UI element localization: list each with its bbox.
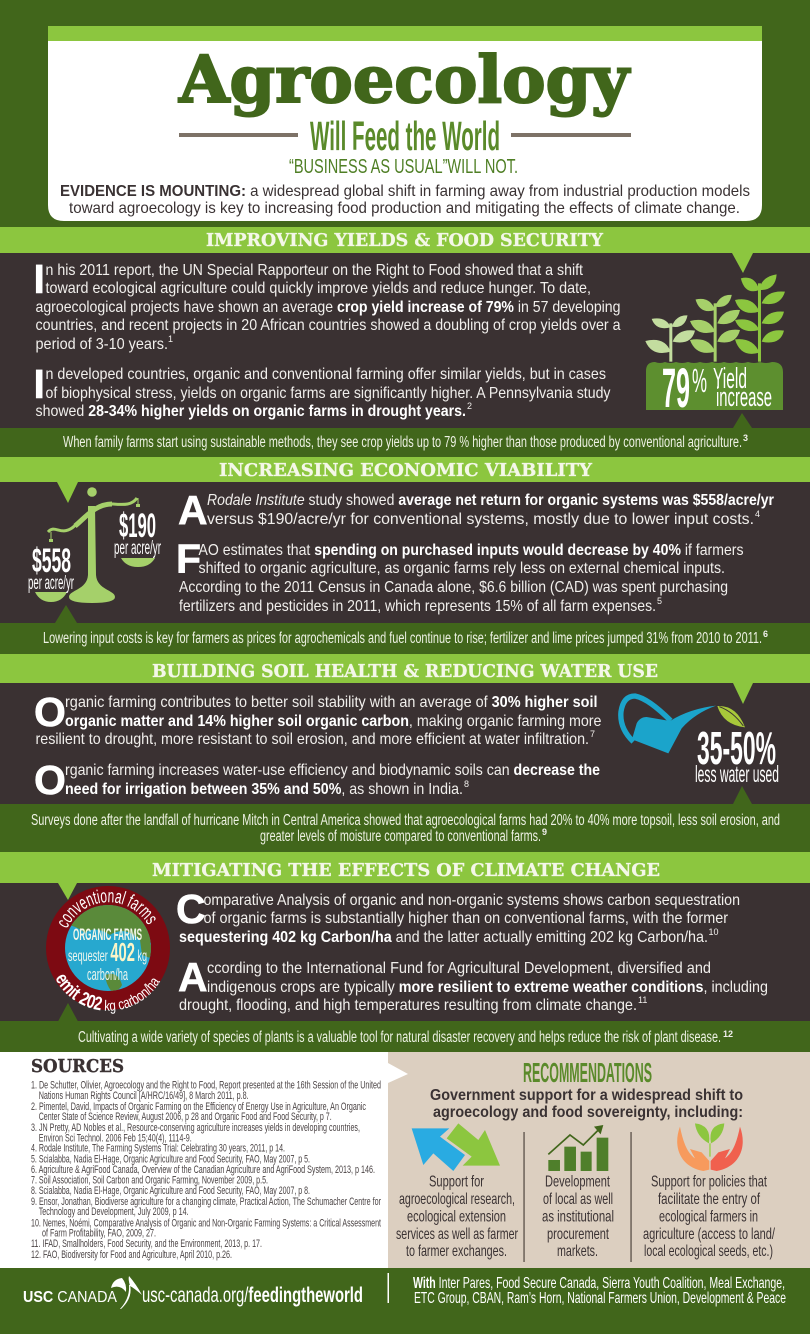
- icon: globe badge: carbon/ha: [87, 965, 128, 984]
- paragraph 1: [34, 256, 621, 353]
- paragraph 1: of organic farms is substantially higher than on conventional farms, with the former: [204, 910, 728, 927]
- label: $190: [114, 507, 161, 559]
- panel: improving yields: [0, 227, 810, 428]
- column 2 text: Development: [545, 1174, 610, 1190]
- panel: recommendations: RECOMMENDATIONS: [523, 1057, 652, 1088]
- source list: 1. De Schutter, Olivier, Agroecology and the Right to Food, Report presented at the 16th Session of the United: [31, 1080, 381, 1092]
- paragraph 2: drought, flooding, and high temperatures resulting from climate change.: [179, 997, 637, 1014]
- column 2 text: markets.: [557, 1243, 598, 1260]
- paragraph 1: 7: [590, 729, 595, 739]
- heading: IMPROVING YIELDS & FOOD SECURITY: [206, 230, 604, 251]
- strip: economic fact: 6: [763, 629, 768, 639]
- icon: globe badge: ORGANIC FARMS: [73, 925, 142, 944]
- strip: soil fact: 9: [542, 827, 547, 837]
- intro: [430, 1087, 743, 1121]
- column 1 text: [396, 1174, 518, 1260]
- arrow: [733, 683, 753, 704]
- column 1 text: to farmer exchanges.: [406, 1243, 507, 1260]
- subtitle with rules: Will Feed the World: [310, 113, 500, 159]
- icon: bar chart: [548, 1125, 608, 1171]
- tagline: “BUSINESS AS USUAL”WILL NOT.: [289, 156, 518, 178]
- paragraph 2: A: [178, 954, 208, 1000]
- paragraph 1: C: [176, 886, 206, 932]
- paragraph 2: fertilizers and pesticides in 2011, which represents 15% of all farm expenses.: [179, 598, 656, 615]
- paragraph 1: 1: [168, 334, 173, 344]
- column 2 text: of local as well: [543, 1191, 613, 1208]
- paragraph 2: of biophysical stress, yields on organic farms are significantly higher. A Pennsylvania study: [46, 385, 611, 402]
- paragraph 1: sequestering 402 kg Carbon/ha and the latter actually emitting 202 kg Carbon/ha.: [179, 929, 708, 946]
- yield callout: Yield: [713, 363, 747, 395]
- paragraph 2: need for irrigation between 35% and 50%, as shown in India.: [65, 781, 463, 798]
- paragraph 2: O: [34, 757, 66, 803]
- paragraph 2: [34, 361, 611, 420]
- paragraph 2: showed 28-34% higher yields on organic farms in drought years.: [36, 403, 466, 420]
- heading: INCREASING ECONOMIC VIABILITY: [219, 460, 593, 481]
- source list: of Farm Profitability, FAO, 2009, 27.: [42, 1228, 156, 1240]
- intro: agroecology and food sovereignty, including:: [433, 1104, 743, 1121]
- arrow: [732, 253, 753, 273]
- source list: 4. Rodale Institute, The Farming Systems Trial: Celebrating 30 years, 2011, p 14.: [31, 1142, 285, 1154]
- paragraph 1: versus $190/acre/yr for conventional systems, mostly due to lower input costs.: [207, 511, 754, 528]
- source list: 2. Pimentel, David, Impacts of Organic Farming on the Efficiency of Energy Use in Agriculture, An Organic: [31, 1101, 366, 1113]
- partners: [413, 1275, 786, 1307]
- icon: globe badge: emit 202 kg carbon/ha: [56, 974, 160, 1014]
- panel: economic viability: [0, 457, 810, 623]
- paragraph 1: omparative Analysis of organic and non-organic systems shows carbon sequestration: [204, 892, 740, 909]
- icon: globe badge: conventional farms: [59, 890, 156, 928]
- paragraph 1: agroecological projects have shown an average crop yield increase of 79% in 57 developing: [36, 299, 620, 316]
- paragraph 1: [34, 689, 602, 748]
- icon: globe badge: sequester 402 kg: [68, 937, 147, 967]
- paragraph 2: indigenous crops are typically more resilient to extreme weather conditions, including: [207, 979, 768, 996]
- intro text: [60, 183, 750, 217]
- arrow: [57, 482, 78, 503]
- paragraph 1: [176, 886, 740, 946]
- source list: 6. Agriculture & AgriFood Canada, Overview of the Canadian Agriculture and AgriFood System, 2013, p 146.: [31, 1164, 375, 1176]
- intro: Government support for a widespread shift to: [430, 1087, 743, 1104]
- paragraph 2: [176, 536, 744, 615]
- label: $190: $190: [119, 507, 156, 545]
- column 2 text: [542, 1174, 614, 1260]
- source list: 11. IFAD, Smallholders, Food Security, and the Environment, 2013, p. 17.: [31, 1238, 262, 1250]
- source list: 3. JN Pretty, AD Nobles et al., Resource-conserving agriculture increases yields in developing countries,: [31, 1122, 360, 1134]
- label: $558: per acre/yr: [28, 573, 74, 594]
- arrow: [58, 883, 77, 900]
- paragraph 2: ccording to the International Fund for Agricultural Development, diversified and: [207, 960, 711, 977]
- paragraph 1: Rodale Institute study showed average net return for organic systems was $558/acre/yr: [207, 492, 774, 509]
- strip: yields fact: [0, 413, 810, 457]
- paragraph 2: [178, 954, 768, 1014]
- paragraph 1: rganic farming contributes to better soil stability with an average of 30% higher soil: [65, 694, 598, 711]
- subtitle with rules: [179, 113, 631, 159]
- icon: globe badge: [46, 886, 170, 1014]
- heading: BUILDING SOIL HEALTH & REDUCING WATER USE: [152, 661, 658, 682]
- yield callout: [646, 356, 783, 419]
- strip: yields fact: 3: [743, 433, 748, 443]
- icon: logo sprout: [111, 1276, 142, 1309]
- column 3 text: ecological farmers in: [659, 1208, 758, 1226]
- paragraph 1: [178, 487, 774, 533]
- icon: plants: [645, 274, 785, 362]
- icon: hands and sprout: [677, 1123, 743, 1171]
- paragraph 1: O: [34, 689, 66, 735]
- paragraph 1: resilient to drought, more resistant to soil erosion, and more efficient at water infiltration.: [36, 731, 589, 748]
- strip: climate fact: 12: [723, 1029, 733, 1039]
- source list: 7. Soil Association, Soil Carbon and Organic Farming, November 2009, p.5.: [31, 1174, 268, 1186]
- source list: 12. FAO, Biodiversity for Food and Agriculture, April 2010, p.26.: [31, 1249, 232, 1261]
- header panel: [48, 26, 762, 221]
- panel: climate change: [0, 852, 810, 1021]
- strip: soil fact: greater levels of moisture compared to conventional farms.: [260, 828, 541, 845]
- column 1 text: agroecological research,: [399, 1191, 515, 1208]
- paragraph 2: F: [176, 536, 201, 582]
- paragraph 1: toward ecological agriculture could quickly improve yields and reduce hunger. To date,: [46, 280, 591, 297]
- panel: recommendations: [388, 1052, 810, 1268]
- source list: 10. Nemes, Noémi, Comparative Analysis of Organic and Non-Organic Farming Systems: a Critical Assessment: [31, 1218, 381, 1230]
- column 1 text: services as well as farmer: [396, 1226, 518, 1243]
- title: Agroecology: [178, 42, 631, 118]
- column 1 text: ecological extension: [407, 1208, 506, 1226]
- source list: Center State of Science Review, August 2006, p 28 and Organic Food and Food Security, p 7.: [39, 1111, 332, 1123]
- column 1 text: Support for: [429, 1174, 484, 1190]
- icon: exchange arrows: [412, 1123, 500, 1171]
- paragraph 2: 5: [657, 596, 662, 606]
- intro text: EVIDENCE IS MOUNTING: a widespread global shift in farming away from industrial production models: [60, 183, 750, 200]
- paragraph 2: shifted to organic agriculture, as organic farms rely less on external chemical inputs.: [198, 560, 725, 577]
- source list: Technology and Development, July 2009, p 14.: [39, 1206, 189, 1218]
- column 2 text: procurement: [547, 1226, 609, 1243]
- paragraph 2: n developed countries, organic and conventional farming offer similar yields, but in cases: [46, 366, 606, 383]
- paragraph 1: A: [178, 487, 208, 533]
- paragraph 2: 2: [467, 401, 472, 411]
- source list: Nations Human Rights Council [A/HRC/16/49], 8 March 2011, p.8.: [39, 1090, 249, 1102]
- icon: watering can: [621, 696, 745, 753]
- paragraph 2: I: [34, 361, 45, 407]
- paragraph 1: countries, and recent projects in 20 African countries showed a doubling of crop yields over a: [36, 317, 621, 334]
- paragraph 1: n his 2011 report, the UN Special Rapporteur on the Right to Food showed that a shift: [46, 262, 584, 279]
- paragraph 2: According to the 2011 Census in Canada alone, $6.6 billion (CAD) was spent purchasing: [179, 579, 728, 596]
- column 2 text: as institutional: [542, 1208, 614, 1226]
- paragraph 2: rganic farming increases water-use efficiency and biodynamic soils can decrease the: [65, 762, 600, 779]
- source list: Environ Sci Technol. 2006 Feb 15;40(4), 1114-9.: [39, 1132, 192, 1144]
- intro text: toward agroecology is key to increasing food production and mitigating the effects of climate change.: [69, 200, 740, 217]
- yield callout: %: [692, 362, 707, 399]
- paragraph 2: [34, 757, 600, 803]
- paragraph 1: period of 3-10 years.: [36, 336, 168, 353]
- paragraph 2: 11: [638, 995, 647, 1005]
- source list: 9. Ensor, Jonathan, Biodiverse agriculture for a changing climate, Practical Action, The Schumacher Centre for: [31, 1196, 381, 1208]
- source list: 5. Scialabba, Nadia El-Hage, Organic Agriculture and Food Security, FAO, May 2007, p 5.: [31, 1154, 310, 1166]
- strip: climate fact: [0, 1003, 810, 1052]
- source list: [31, 1080, 381, 1261]
- column 3 text: [643, 1174, 775, 1260]
- label: $558: [28, 542, 74, 594]
- panel: sources: [0, 1052, 388, 1268]
- paragraph 2: 8: [464, 779, 469, 789]
- website: usc-canada.org/feedingtheworld: [142, 1284, 363, 1307]
- water callout: [695, 722, 779, 787]
- paragraph 1: 10: [708, 927, 719, 937]
- icon: scale: [35, 487, 155, 603]
- paragraph 1: 4: [755, 509, 760, 519]
- column 3 text: facilitate the entry of: [658, 1191, 760, 1208]
- panel: soil health: [0, 654, 810, 804]
- paragraph 1: organic matter and 14% higher soil organic carbon, making organic farming more: [65, 713, 602, 730]
- paragraph 1: I: [34, 256, 45, 302]
- strip: soil fact: [0, 786, 810, 852]
- strip: economic fact: [0, 605, 810, 654]
- paragraph 2: AO estimates that spending on purchased inputs would decrease by 40% if farmers: [198, 542, 744, 559]
- label: $558: $558: [32, 542, 71, 580]
- yield callout: 79: [662, 356, 690, 419]
- logo wordmark: USC CANADA: [23, 1289, 117, 1306]
- heading: MITIGATING THE EFFECTS OF CLIMATE CHANGE: [152, 860, 660, 881]
- source list: 8. Scialabba, Nadia El-Hage, Organic Agriculture and Food Security, FAO, May 2007, p 8.: [31, 1185, 310, 1197]
- footer: [23, 1273, 786, 1309]
- label: $190: per acre/yr: [114, 538, 161, 559]
- arrow: [388, 1063, 408, 1083]
- heading: SOURCES: [31, 1056, 124, 1077]
